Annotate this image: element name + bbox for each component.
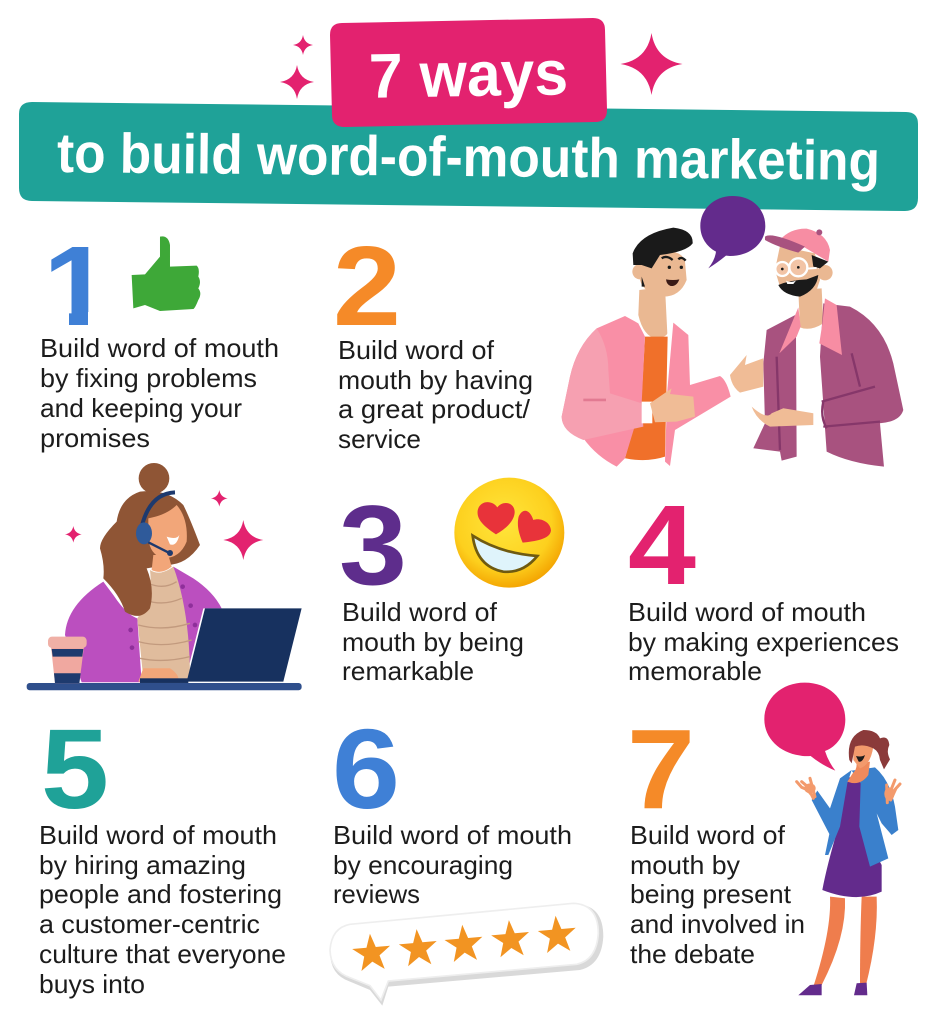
- step 6 number: 6: [332, 706, 400, 832]
- step 7 text: being present: [630, 879, 792, 909]
- step 2 text: a great product/: [338, 394, 531, 424]
- step 7 text: [630, 820, 805, 969]
- speech bubble with five stars: [330, 903, 603, 1006]
- icon: green thumbs up: [132, 236, 200, 311]
- illustration: support agent with headset at laptop: [27, 463, 302, 690]
- step 1 text: Build word of mouth: [40, 333, 279, 363]
- step 5 text: buys into: [39, 969, 145, 999]
- step 7 text: mouth by: [630, 850, 740, 880]
- step 1 text: and keeping your: [40, 393, 242, 423]
- step 4 text: by making experiences: [628, 627, 899, 657]
- step 7 text: Build word of: [630, 820, 786, 850]
- step 7 text: and involved in: [630, 909, 805, 939]
- step 5 text: culture that everyone: [39, 939, 286, 969]
- step 4 text: memorable: [628, 656, 762, 686]
- speech bubble: pink: [764, 683, 845, 771]
- title badge: 7 ways: 7 ways: [368, 38, 569, 112]
- illustration: two men talking: [562, 196, 903, 467]
- right man: [730, 229, 903, 467]
- step 1 text: promises: [40, 423, 150, 453]
- step 2 text: [338, 335, 533, 454]
- title banner: to build word-of-mouth marketing: [19, 102, 918, 211]
- step 3 text: mouth by being: [342, 627, 524, 657]
- step 7 number: 7: [627, 706, 695, 832]
- step 3 text: remarkable: [342, 656, 474, 686]
- step 6 text: by encouraging: [333, 850, 513, 880]
- step 6 text: Build word of mouth: [333, 820, 572, 850]
- step 1 text: [40, 333, 279, 453]
- left man: [562, 228, 731, 467]
- step 7 text: the debate: [630, 939, 755, 969]
- icon: heart-eyes emoji: [454, 478, 564, 588]
- step 2 text: service: [338, 424, 421, 454]
- step 5 number: 5: [41, 706, 109, 832]
- coffee cup: [48, 637, 87, 683]
- sparkles around title: [280, 33, 682, 99]
- step 5 text: [39, 820, 286, 999]
- step 5 text: Build word of mouth: [39, 820, 277, 850]
- title badge: 7 ways: [330, 18, 607, 127]
- title banner: to build word-of-mouth marketing: to build word-of-mouth marketing: [57, 121, 880, 192]
- step 4 text: [628, 597, 899, 686]
- sparkles around agent: [65, 490, 263, 560]
- step 1 number: 1: [43, 223, 111, 349]
- step 4 number: 4: [628, 482, 696, 608]
- step 2 text: Build word of: [338, 335, 495, 365]
- step 3 text: [342, 597, 524, 686]
- step 5 text: by hiring amazing: [39, 850, 246, 880]
- step 1 text: by fixing problems: [40, 363, 257, 393]
- speech bubble: purple: [700, 196, 765, 268]
- step 6 text: [333, 820, 572, 909]
- step 2 text: mouth by having: [338, 365, 533, 395]
- step 5 text: a customer-centric: [39, 909, 260, 939]
- step 3 number: 3: [339, 482, 407, 608]
- step 6 text: reviews: [333, 879, 420, 909]
- step 3 text: Build word of: [342, 597, 498, 627]
- step 4 text: Build word of mouth: [628, 597, 866, 627]
- step 2 number: 2: [333, 223, 401, 349]
- illustration: woman speaking with pink speech bubble: [764, 683, 900, 995]
- step 5 text: people and fostering: [39, 879, 282, 909]
